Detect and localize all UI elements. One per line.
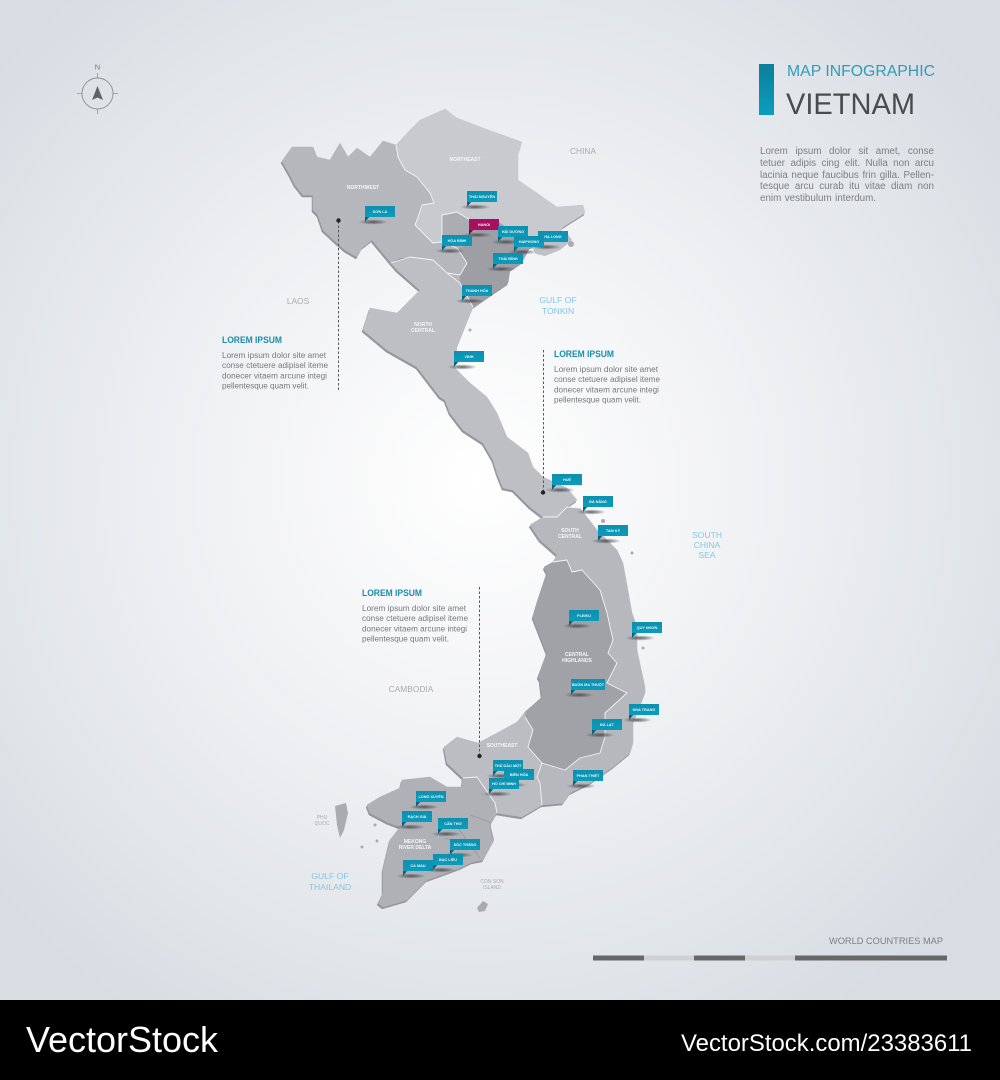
pin: Vinh: VINH: [464, 355, 474, 359]
callout: Northwest: conse ctetuere adipisel iteme: [222, 360, 328, 370]
title block: [759, 63, 935, 121]
pin: Soc Trang: SÓC TRĂNG: [454, 842, 476, 847]
pin: Tam Ky: [591, 525, 628, 544]
region labels: [347, 157, 593, 851]
pin: Bac Lieu: BẠC LIÊU: [439, 857, 457, 862]
callout: Central: conse ctetuere adipisel iteme: [554, 374, 660, 384]
country and sea labels: SOUTH: [692, 530, 722, 540]
pin: Da Nang: [576, 496, 613, 515]
icon: compass: N: [95, 62, 100, 72]
scale bar: [593, 936, 947, 960]
country and sea labels: LAOS: [287, 296, 310, 306]
country and sea labels: CHINA: [570, 146, 596, 156]
country and sea labels: SEA: [698, 550, 716, 560]
callout: South: Lorem ipsum dolor site amet: [362, 603, 467, 613]
pin: Thai Binh: [486, 253, 523, 272]
region: South Central: [530, 507, 645, 805]
region labels: SOUTHEAST: [487, 743, 517, 749]
region labels: RIVER DELTA: [399, 845, 432, 851]
pin: Hai Duong: HẢI DƯƠNG: [502, 229, 524, 234]
pin: Vinh: [447, 351, 484, 370]
country and sea labels: CON SON: [480, 879, 504, 885]
pin: Quy Nhon: QUY NHƠN: [637, 626, 658, 630]
pin: Nha Trang: NHA TRANG: [633, 708, 655, 712]
callout: Central: [541, 349, 660, 495]
region labels: CENTRAL: [558, 534, 582, 540]
pin: Thai Binh: THÁI BÌNH: [498, 256, 518, 261]
callout: Central: LOREM IPSUM: [554, 349, 614, 360]
region labels: NORTHWEST: [347, 185, 379, 191]
pin: Quy Nhon: [625, 622, 662, 641]
pin: Ho Chi Minh: HỒ CHÍ MINH: [492, 781, 516, 786]
intro text: enim vestibulum interdum.: [760, 193, 876, 204]
pin: Bien Hoa: [497, 769, 534, 788]
pin: Pleiku: [562, 610, 599, 629]
region labels: NORTH: [414, 322, 432, 328]
region labels: HIGHLANDS: [562, 658, 593, 664]
pin: Ca Mau: CÀ MAU: [410, 863, 426, 868]
scale bar: WORLD COUNTRIES MAP: [829, 936, 943, 946]
callout: Central: donecer vitaem arcune integi: [554, 384, 659, 394]
intro text: tetuer adipis cing elit. Nulla non arcu: [760, 158, 934, 169]
footer bar: VectorStock.com/23383611: [681, 1030, 972, 1057]
callout: South: LOREM IPSUM: [362, 588, 422, 599]
callout: Northwest: pellentesque quam velit.: [222, 380, 309, 390]
pin: Haiphong: HAIPHONG: [519, 240, 539, 244]
city pins: [358, 191, 662, 879]
region: Mekong River Delta: [367, 777, 497, 907]
callout: Northwest: LOREM IPSUM: [222, 335, 282, 346]
pin: Rach Gia: [395, 811, 432, 830]
Mekong river branches: [445, 815, 492, 858]
footer bar: VectorStock: [26, 1019, 219, 1060]
country and sea labels: [287, 146, 722, 892]
pin: Bien Hoa: BIÊN HÒA: [510, 772, 529, 777]
pin: Thai Nguyen: [460, 191, 497, 210]
pin: Hue: HUẾ: [563, 477, 571, 482]
callout: Central: Lorem ipsum dolor site amet: [554, 364, 659, 374]
country and sea labels: THAILAND: [309, 882, 351, 892]
country and sea labels: TONKIN: [542, 306, 574, 316]
pin: Thai Nguyen: THÁI NGUYÊN: [469, 194, 495, 199]
icon: compass: [77, 62, 118, 114]
pin: Soc Trang: [443, 839, 480, 858]
region: Central Highlands: [525, 560, 627, 770]
pin: Hoa Binh: HÒA BÌNH: [448, 238, 467, 243]
region labels: CENTRAL: [411, 328, 435, 334]
pin: Hoa Binh: [435, 235, 472, 254]
pin: Haiphong: [507, 236, 544, 255]
pin: Thu Dau Mot: THỦ DẦU MỘT: [495, 763, 522, 768]
callout: South: pellentesque quam velit.: [362, 634, 449, 644]
pin: Da Lat: ĐÀ LẠT: [600, 722, 615, 727]
callout: Northwest: [222, 218, 341, 390]
intro text: lacinia neque faucibus frin gilla. Pellen-: [760, 170, 934, 181]
title block: MAP INFOGRAPHIC: [787, 63, 935, 80]
pin: Da Nang: ĐÀ NẴNG: [589, 499, 607, 504]
intro text: tesque arcu curab itu vitae diam non: [760, 181, 934, 192]
pin: Hue: [545, 474, 582, 493]
pin: Son La: [358, 206, 395, 225]
region: Southeast: [444, 712, 542, 817]
pin: Hai Duong: [491, 226, 528, 245]
pin: Rach Gia: RẠCH GIÁ: [408, 814, 427, 819]
pin: Nha Trang: [622, 704, 659, 723]
intro text: Lorem ipsum dolor sit amet, conse: [760, 146, 934, 157]
pin: Long Xuyen: [409, 791, 446, 810]
region: Hoa Binh: [442, 212, 470, 248]
country and sea labels: PHU: [317, 815, 328, 821]
country and sea labels: CAMBODIA: [389, 684, 434, 694]
pin: Buon Ma Thuot: BUÔN MA THUỘT: [572, 682, 605, 687]
pin: Pleiku: PLEIKU: [577, 614, 591, 618]
callout: Central: pellentesque quam velit.: [554, 394, 641, 404]
pin: Thu Dau Mot: [486, 760, 523, 779]
islands: [335, 232, 644, 912]
region labels: NORTHEAST: [449, 157, 481, 163]
region: Northwest: [282, 141, 467, 283]
region labels: CENTRAL: [565, 652, 589, 658]
pin: Ha Long: [531, 231, 568, 250]
pin: Long Xuyen: LONG XUYÊN: [418, 794, 444, 799]
country and sea labels: QUOC: [314, 821, 330, 827]
country and sea labels: GULF OF: [311, 871, 349, 881]
intro text: [760, 146, 934, 204]
callout: South: conse ctetuere adipisel iteme: [362, 613, 468, 623]
pin: Can Tho: CẦN THƠ: [444, 822, 463, 826]
callout: South: [362, 587, 482, 758]
pin: Ha Long: HẠ LONG: [544, 235, 562, 239]
callout: Northwest: Lorem ipsum dolor site amet: [222, 350, 327, 360]
country and sea labels: CHINA: [694, 540, 721, 550]
pin: Hanoi: [462, 219, 499, 238]
region: North Central: [363, 257, 577, 517]
pin: Ho Chi Minh: [482, 778, 519, 797]
country and sea labels: ISLAND: [483, 885, 501, 891]
region borders: [396, 145, 470, 243]
region labels: SOUTH: [561, 528, 579, 534]
pin: Thanh Hoa: [455, 285, 492, 304]
pin: Son La: SƠN LA: [373, 210, 388, 214]
title block: VIETNAM: [786, 88, 915, 121]
pin: Can Tho: [431, 818, 468, 837]
pin: Buon Ma Thuot: [564, 679, 605, 698]
pin: Phan Thiet: PHAN THIẾT: [577, 773, 600, 778]
region labels: MEKONG: [404, 839, 426, 845]
pin: Phan Thiet: [566, 770, 603, 789]
callout: Northwest: donecer vitaem arcune integi: [222, 370, 327, 380]
pin: Ca Mau: [396, 860, 433, 879]
callout: South: donecer vitaem arcune integi: [362, 624, 467, 634]
pin: Hanoi: HANOI: [478, 223, 490, 227]
map of Vietnam: [282, 109, 645, 912]
pin: Thanh Hoa: THANH HÓA: [466, 288, 489, 293]
country and sea labels: GULF OF: [539, 295, 577, 305]
pin: Bac Lieu: [426, 854, 463, 873]
pin: Da Lat: [585, 719, 622, 738]
footer bar: [0, 1000, 1000, 1080]
pin: Tam Ky: TAM KỲ: [606, 528, 621, 533]
region: Red River Delta: [457, 220, 530, 307]
region: Northeast: [396, 109, 585, 247]
